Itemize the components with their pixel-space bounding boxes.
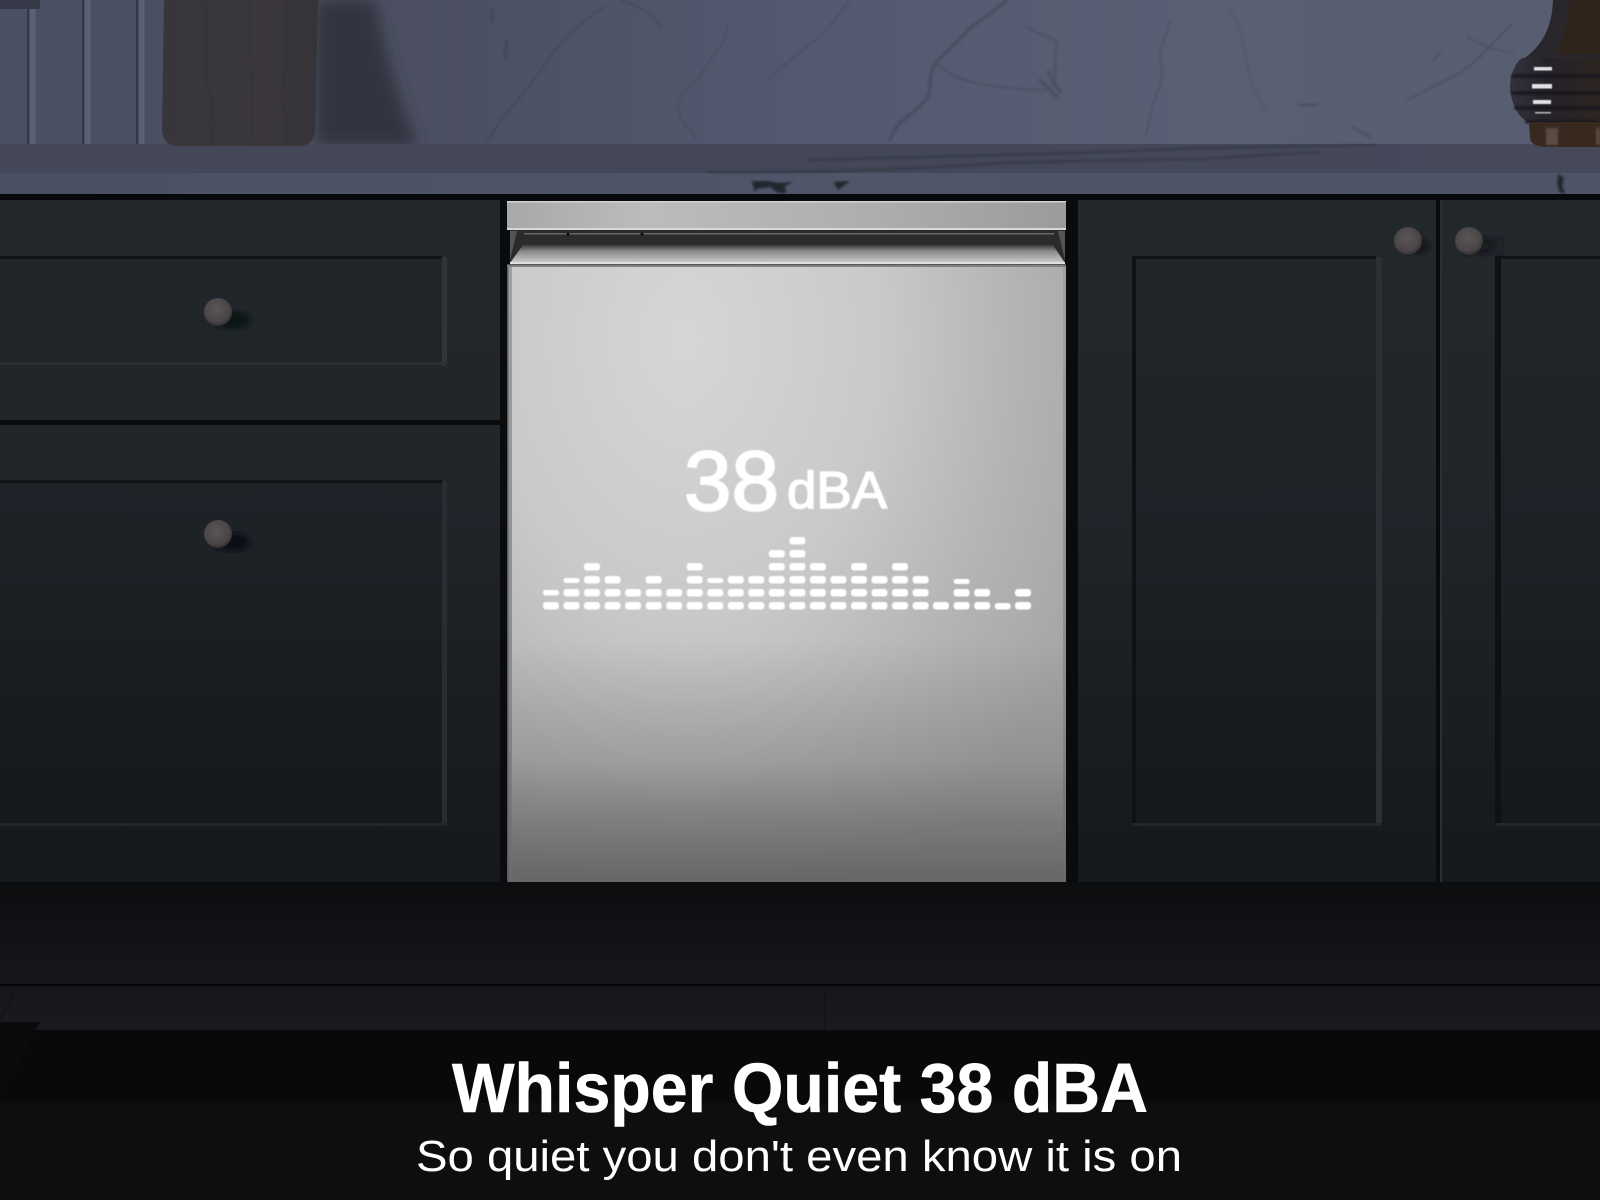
toe kick (0, 882, 1600, 984)
dishwasher (507, 201, 1066, 882)
dishwasher door (507, 267, 1066, 882)
floor (0, 984, 1600, 1030)
38 number: 38 (684, 434, 779, 528)
subtitle: So quiet you don't even know it is on (416, 1132, 1182, 1181)
dBA unit: dBA (787, 462, 887, 520)
wainscot panel on left wall (0, 0, 163, 144)
wall shadow behind board (316, 0, 418, 146)
right door one (1078, 200, 1436, 882)
icon: drawer knob (204, 298, 250, 329)
icon: cabinet knob left (1394, 227, 1430, 255)
title: Whisper Quiet 38 dBA (452, 1049, 1148, 1127)
caption band (0, 1022, 1600, 1200)
lower cabinet door (0, 425, 500, 882)
top drawer (0, 200, 500, 420)
vase (1510, 0, 1600, 147)
countertop (0, 144, 1600, 200)
38 dBA label (684, 434, 887, 528)
marble backsplash wall (0, 0, 1600, 146)
icon: door knob (204, 520, 250, 551)
dishwasher top panel (507, 201, 1066, 230)
cutting board (162, 0, 318, 146)
sound level equalizer (543, 537, 1031, 610)
icon: cabinet knob right (1455, 227, 1500, 255)
right door two (1440, 200, 1600, 882)
right cabinets (1078, 200, 1600, 882)
dishwasher handle recess (507, 230, 1066, 267)
marble veins (487, 0, 1513, 142)
left cabinets (0, 200, 1600, 882)
